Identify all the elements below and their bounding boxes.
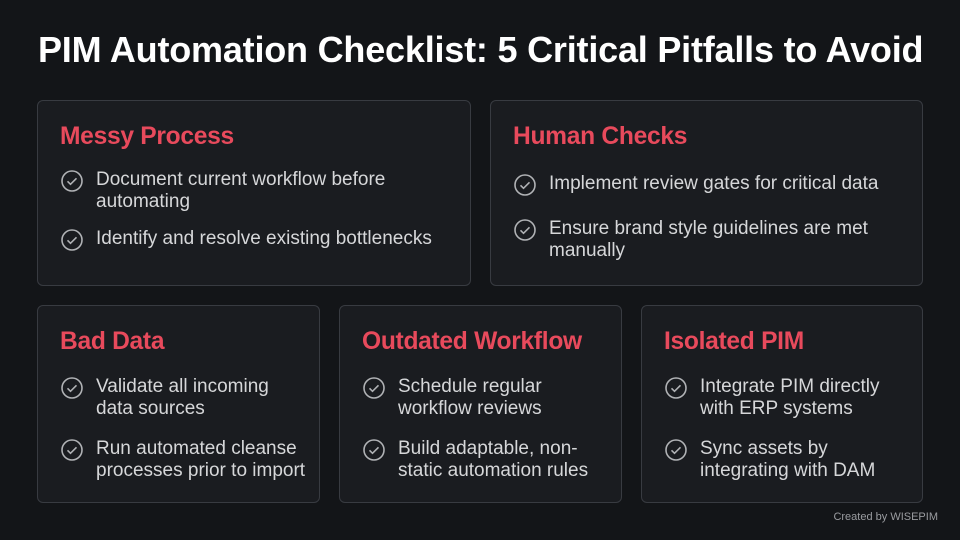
item — [61, 376, 269, 419]
item: Document current workflow before — [96, 169, 385, 190]
panel: isolated pim — [641, 305, 923, 503]
item: static automation rules — [398, 460, 588, 481]
item — [61, 169, 385, 212]
item: Run automated cleanse — [96, 438, 297, 459]
item — [514, 218, 868, 261]
item: with ERP systems — [700, 398, 853, 419]
item: Identify and resolve existing bottlenecks — [96, 228, 432, 249]
panel: bad data — [37, 305, 320, 503]
title: PIM Automation Checklist: 5 Critical Pitfalls to Avoid — [38, 29, 923, 70]
item — [363, 376, 542, 419]
heading: Isolated PIM — [664, 328, 804, 355]
panel: messy process — [37, 100, 471, 286]
item: Implement review gates for critical data — [549, 173, 878, 194]
item — [363, 438, 588, 481]
heading: Outdated Workflow — [362, 328, 582, 355]
heading: Bad Data — [60, 328, 164, 355]
item: Build adaptable, non- — [398, 438, 578, 459]
item: Validate all incoming — [96, 376, 269, 397]
item: workflow reviews — [398, 398, 542, 419]
item: integrating with DAM — [700, 460, 875, 481]
item — [61, 438, 305, 481]
credit: Created by WISEPIM — [833, 511, 938, 523]
item: automating — [96, 191, 190, 212]
item: data sources — [96, 398, 205, 419]
item: Schedule regular — [398, 376, 542, 397]
panel: outdated workflow — [339, 305, 622, 503]
item — [665, 376, 880, 419]
panel: human checks — [490, 100, 923, 286]
item: Ensure brand style guidelines are met — [549, 218, 868, 239]
item — [665, 438, 875, 481]
item: processes prior to import — [96, 460, 305, 481]
item: Integrate PIM directly — [700, 376, 880, 397]
heading: Human Checks — [513, 123, 687, 150]
item: Sync assets by — [700, 438, 828, 459]
item: manually — [549, 240, 625, 261]
heading: Messy Process — [60, 123, 234, 150]
